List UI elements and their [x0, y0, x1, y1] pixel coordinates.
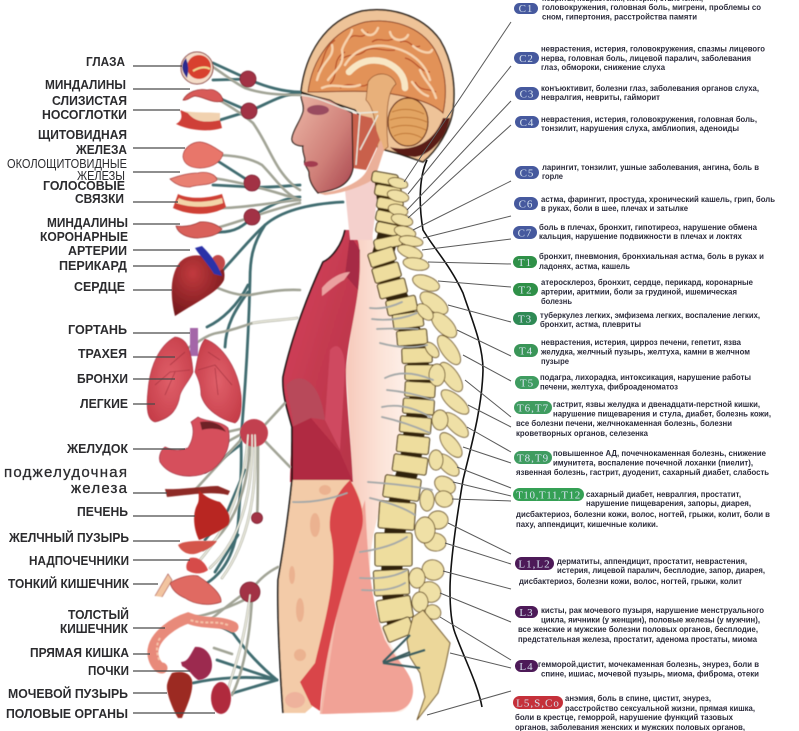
- head: skull and brain: [292, 10, 454, 195]
- torso and abdomen: [278, 230, 413, 714]
- segment T1: ладонях, астма, кашель: [539, 261, 630, 271]
- segment L3: L3: [519, 607, 534, 619]
- label text: КИШЕЧНИК: [60, 621, 128, 636]
- label text: ТОНКИЙ КИШЕЧНИК: [8, 576, 129, 591]
- segment C4: тонзилит, нарушения слуха, амблиопия, аденоиды: [541, 123, 739, 133]
- label text: ЖЕЛУДОК: [66, 441, 128, 456]
- label text: ПРЯМАЯ КИШКА: [30, 645, 130, 660]
- segment L3: все женские и мужские болезни половых органов, бесплодие,: [518, 624, 758, 634]
- icon: kidney: [181, 647, 212, 680]
- label text: поджелудочная: [4, 464, 127, 481]
- icon: large intestine: [153, 618, 233, 668]
- segment C5: C5: [520, 168, 534, 180]
- lower pink area: [322, 500, 413, 714]
- icon: liver: [194, 490, 230, 540]
- abdomen texture: [285, 485, 331, 708]
- segment T10,T11,T12: паху, аппендицит, кишечные колики.: [516, 519, 658, 529]
- segment L3: кисты, рак мочевого пузыря, нарушение менструального: [541, 605, 764, 615]
- segment L1,L2: L1,L2: [518, 558, 551, 570]
- icon: tonsils: [183, 89, 223, 102]
- segment C4: [515, 114, 757, 133]
- segment T5: подагра, лихорадка, интоксикация, нарушение работы: [540, 372, 751, 382]
- segment T10,T11,T12: T10,T11,T12: [516, 490, 581, 502]
- icon: heart: [172, 246, 225, 316]
- lower chest segment: [290, 418, 353, 482]
- icon: pancreas: [165, 486, 230, 497]
- segment T10,T11,T12: [513, 488, 770, 529]
- icon: thyroid: [183, 142, 223, 168]
- segment L1,L2: дерматиты, аппендицит, простатит, неврастения,: [557, 556, 747, 566]
- label text: МИНДАЛИНЫ: [45, 77, 126, 92]
- neck: [345, 175, 380, 240]
- icon: small intestine: [155, 574, 221, 604]
- label text: ТОЛСТЫЙ: [68, 607, 129, 622]
- chest shading: [286, 235, 360, 450]
- brain: [308, 21, 445, 113]
- segment T8,T9: повышенное АД, почечнокаменная болезнь, снижение: [553, 448, 766, 458]
- segment T2: артерии, аритмии, боли за грудиной, ишемическая: [541, 286, 737, 296]
- segment C5: [515, 162, 759, 181]
- segment T1: [513, 251, 764, 271]
- segment T3: туберкулез легких, эмфизема легких, воспаление легких,: [540, 310, 760, 320]
- label text: БРОНХИ: [77, 371, 128, 386]
- grey outer strokes: [173, 67, 300, 695]
- icon: parathyroid: [170, 172, 217, 187]
- label text: МОЧЕВОЙ ПУЗЫРЬ: [8, 686, 128, 701]
- segment C2: [514, 44, 765, 72]
- label text: АРТЕРИИ: [68, 243, 127, 258]
- label text: ПОЛОВЫЕ ОРГАНЫ: [6, 706, 128, 721]
- segment T1: T1: [518, 257, 532, 269]
- label text: НОСОГЛОТКИ: [42, 107, 127, 122]
- dark disc backing: [382, 178, 420, 630]
- spinous processes: [386, 176, 473, 622]
- segment L1,L2: [515, 556, 765, 586]
- label text: ТРАХЕЯ: [78, 346, 127, 361]
- segment C1: головокружения, головная боль, мигрени, проблемы со: [542, 2, 761, 12]
- segment C2: глаз, обмороки, снижение слуха: [541, 62, 665, 72]
- label text: ЖЕЛЕЗА: [75, 142, 128, 157]
- segment T1: бронхит, пневмония, бронхиальная астма, боль в руках и: [539, 251, 764, 261]
- label text: ГЛАЗА: [86, 54, 126, 69]
- segment L3: предстательная железа, простатит, аденома простаты, миома: [518, 634, 757, 644]
- segment C6: C6: [519, 198, 533, 210]
- brain gyri dark: [318, 32, 436, 92]
- segment C1: C1: [519, 3, 533, 15]
- corpus callosum: [349, 60, 405, 88]
- segment L5,S,Co: боли в крестце, геморрой, нарушение функций тазовых: [515, 712, 733, 722]
- segment C3: конъюктивит, болезни глаз, заболевания органов слуха,: [541, 83, 759, 93]
- segment T2: болезнь: [541, 296, 572, 306]
- icon: bladder: [167, 672, 192, 718]
- segment L4: гемморой,цистит, мочекаменная болезнь, энурез, боли в: [538, 659, 759, 669]
- chest muscle: [283, 230, 360, 482]
- segment L3: [515, 605, 764, 644]
- lips: [304, 161, 318, 167]
- segment T5: [515, 372, 751, 392]
- segment L4: спине, ишиас, мочевой пузырь, миома, фиброма, отеки: [541, 668, 759, 678]
- nerve network: teal autonomic trunks: [193, 63, 343, 693]
- segment T3: [513, 310, 760, 329]
- label text: [4, 54, 130, 721]
- leader lines: [133, 66, 215, 713]
- segment T5: T5: [520, 378, 534, 390]
- segment T10,T11,T12: дисбактериоз, болезни кожи, волос, ногтей, грыжи, колит, боли в: [516, 509, 770, 519]
- eye socket: [307, 105, 329, 115]
- back outline: [420, 160, 483, 707]
- label text: ЖЕЛЕЗЫ: [77, 169, 125, 183]
- segment T6,T7: гастрит, язвы желудка и двенадцати-перстной кишки,: [553, 399, 760, 409]
- segment T6,T7: [514, 399, 771, 438]
- segment L4: L4: [519, 661, 534, 673]
- segment C1: сном, гипертония, расстройства памяти: [542, 12, 697, 22]
- segment T6,T7: все болезни печени, желчнокаменная болезнь, болезни: [516, 418, 732, 428]
- segment T4: неврастения, истерия, цирроз печени, гепетит, язва: [541, 337, 741, 347]
- segment C4: неврастения, истерия, головокружения, головная боль,: [541, 114, 757, 124]
- icon: genital organ: [211, 682, 231, 714]
- icon: tonsils lower: [176, 222, 222, 238]
- segment L4: [515, 659, 759, 678]
- face: [292, 93, 353, 193]
- segment T6,T7: T6,T7: [517, 402, 549, 414]
- segment C3: невралгия, невриты, гайморит: [541, 92, 660, 102]
- segment C7: боль в плечах, бронхит, гипотиреоз, нарушение обмена: [539, 222, 757, 232]
- red oblique band: [300, 480, 363, 711]
- skull: [301, 10, 454, 162]
- segment C3: [515, 83, 759, 102]
- segment L5,S,Co: [513, 693, 755, 731]
- segment C4: C4: [520, 117, 534, 129]
- pale inner torso band: [320, 230, 413, 714]
- segment C3: C3: [520, 88, 534, 100]
- segment C7: кальция, нарушение подвижности в плечах и локтях: [539, 231, 742, 241]
- vertebral bodies: [367, 171, 435, 643]
- organs: [147, 52, 241, 718]
- brain gyri light: [317, 28, 436, 98]
- segment C6: в руках, боли в шее, плечах и затылке: [541, 203, 688, 213]
- label text: ПЕЧЕНЬ: [77, 504, 128, 519]
- segment T2: [513, 277, 753, 306]
- segment L5,S,Co: L5,S,Co: [516, 698, 560, 710]
- segment L5,S,Co: анэмия, боль в спине, цистит, энурез,: [565, 693, 711, 703]
- label text: СВЯЗКИ: [75, 191, 124, 206]
- label text: ПЕРИКАРД: [59, 258, 128, 273]
- segment T8,T9: [514, 448, 769, 477]
- segment T2: атеросклероз, бронхит, сердце, перикард, коронарные: [541, 277, 753, 287]
- segment C7: [513, 222, 757, 241]
- label text: железа: [71, 480, 128, 497]
- dark hollow under cerebellum: [390, 118, 450, 157]
- left organ labels with leader lines: [4, 54, 215, 721]
- throat interior: [352, 113, 380, 170]
- label text: ЖЕЛЧНЫЙ ПУЗЫРЬ: [8, 530, 129, 545]
- connector lines from spine to segments: [404, 22, 511, 715]
- label text: КОРОНАРНЫЕ: [40, 229, 128, 244]
- segment T2: T2: [518, 284, 533, 296]
- icon: adrenals: [186, 558, 208, 573]
- ganglia: [240, 71, 268, 602]
- icon: eye: [181, 52, 213, 84]
- segment T5: печени, желтуха, фиброаденоматоз: [540, 382, 678, 392]
- nerves to spine: [293, 302, 433, 668]
- segment L1,L2: истерия, лицевой паралич, бесплодие, запор, диарея,: [557, 565, 765, 575]
- segment T6,T7: кроветворных органов, селезенка: [516, 428, 648, 438]
- icon: lungs: [147, 337, 241, 423]
- spinal grey nerves: [293, 302, 433, 590]
- segment T4: желудка, желчный пузырь, желтуха, камни в желчном: [540, 346, 750, 356]
- icon: vocal cords: [173, 194, 226, 214]
- segment T3: T3: [518, 314, 532, 326]
- label text: СЛИЗИСТАЯ: [52, 93, 127, 108]
- label text: ПОЧКИ: [88, 663, 129, 678]
- sacrum and coccyx: [407, 610, 450, 720]
- label text: СЕРДЦЕ: [74, 279, 125, 294]
- abdominal wall: [278, 480, 363, 713]
- segment T10,T11,T12: нарушение пищеварения, запоры, диарея,: [586, 498, 751, 508]
- segment C7: C7: [518, 228, 532, 240]
- label text: ГОРТАНЬ: [68, 322, 127, 337]
- icon: nasopharynx: [176, 110, 222, 130]
- label text: НАДПОЧЕЧНИКИ: [29, 553, 129, 568]
- sacral teal nerves: [383, 635, 425, 668]
- segment L3: цикла, яичники (у женщин), половые железы (у мужчин),: [541, 614, 760, 624]
- icon: stomach: [159, 417, 229, 476]
- segment C5: горле: [542, 171, 563, 181]
- nerve network: grey visceral nerves: [173, 67, 300, 695]
- segment C2: нерва, головная боль, лицевой паралич, заболевания: [541, 53, 751, 63]
- segment T4: пузыре: [541, 356, 569, 366]
- segment T4: T4: [519, 346, 533, 358]
- segment C2: неврастения, истерия, головокружения, спазмы лицевого: [541, 44, 765, 54]
- cerebellum: [388, 98, 428, 146]
- segment T8,T9: T8,T9: [517, 452, 549, 464]
- segment T6,T7: нарушение пищеварения и стула, диабет, болезнь кожи,: [553, 408, 771, 418]
- segment C5: ларингит, тонзилит, ушные заболевания, ангина, боль в: [542, 162, 759, 172]
- label text: ЩИТОВИДНАЯ: [38, 127, 127, 142]
- segment C6: [514, 194, 775, 213]
- segment L5,S,Co: расстройство сексуальной жизни, прямая кишка,: [565, 703, 755, 713]
- segment C2: C2: [519, 53, 534, 65]
- icon: gall bladder: [178, 541, 217, 554]
- label text: ОКОЛОЩИТОВИДНЫЕ: [7, 157, 127, 171]
- nerve light centres: [200, 318, 297, 690]
- segment T8,T9: имунитета, воспаление почечной лоханки (пиелит),: [553, 458, 753, 468]
- segment C6: астма, фарингит, простуда, хронический кашель, грип, боль: [541, 194, 775, 204]
- label text: МИНДАЛИНЫ: [47, 215, 128, 230]
- brainstem: [366, 74, 396, 155]
- jaw: [318, 140, 384, 195]
- label text: ГОЛОСОВЫЕ: [43, 178, 125, 193]
- segment T3: бронхит, астма, плевриты: [540, 319, 641, 329]
- segment T10,T11,T12: сахарный диабет, невралгия, простатит,: [586, 489, 741, 499]
- segment T8,T9: язвенная болезнь, гастрит, дуоденит, сахарный диабет, слабость: [516, 467, 769, 477]
- front body outline: [278, 230, 345, 713]
- icon: trachea: [190, 328, 198, 356]
- segment T4: [514, 337, 750, 366]
- spine: [367, 171, 473, 720]
- segment C1: [514, 0, 761, 22]
- label text: ЛЕГКИЕ: [80, 396, 128, 411]
- segment L1,L2: дисбактериоз, болезни кожи, волос, ногтей, грыжи, колит: [519, 576, 742, 586]
- forehead nerve: [300, 95, 378, 165]
